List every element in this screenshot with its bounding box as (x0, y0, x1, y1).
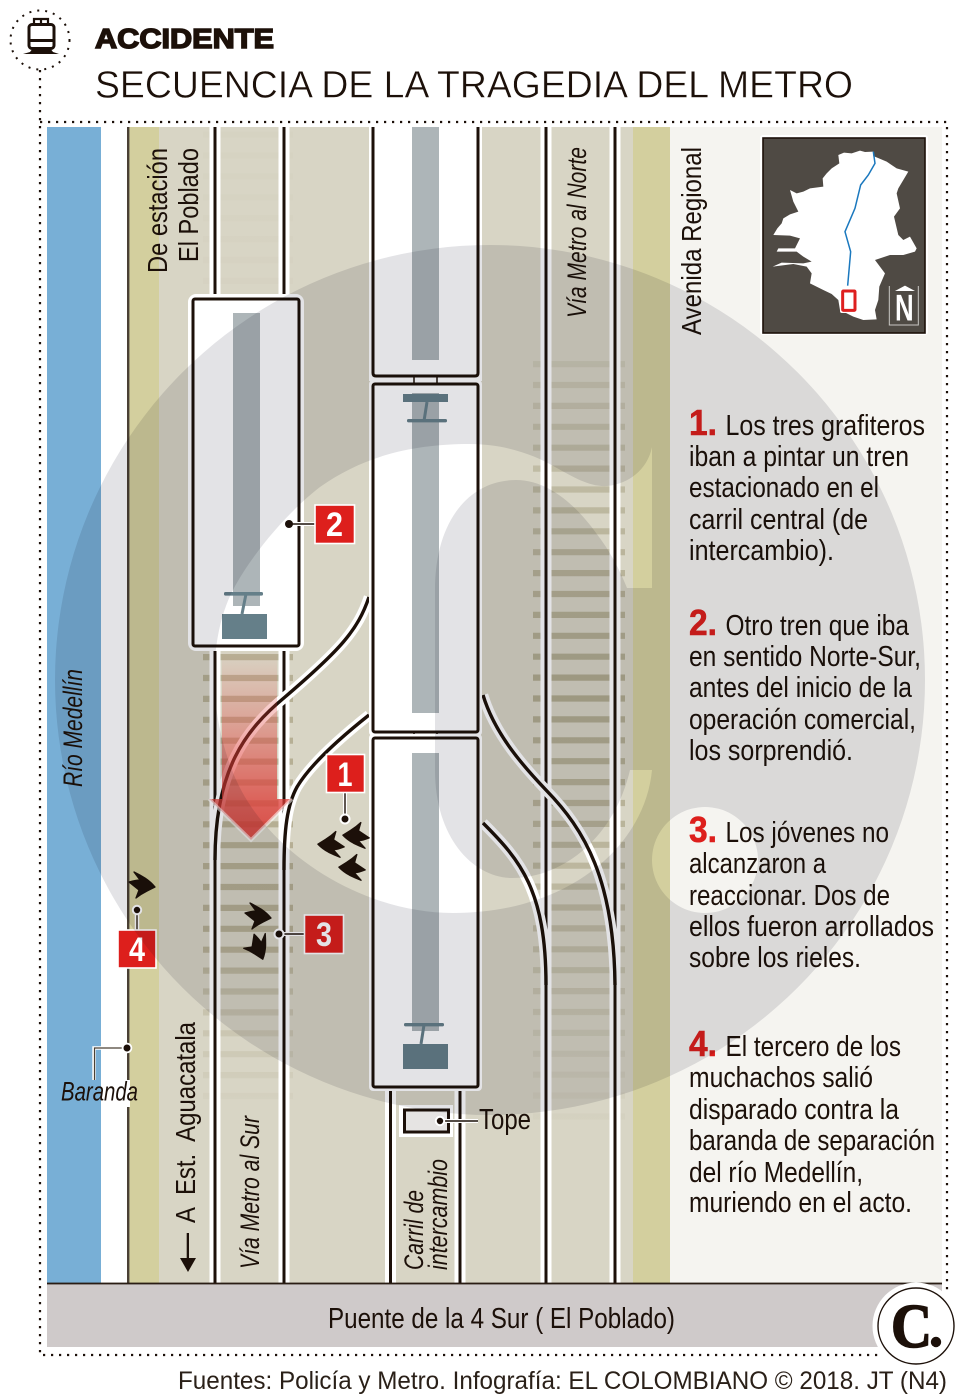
watermark: large C logo disc (55, 245, 925, 1115)
rotated labels: Río Medellín (58, 669, 88, 787)
text block: step 4: baranda de separación (689, 1125, 935, 1157)
train: parked train, upper car (369, 127, 482, 381)
Medellín river line (845, 152, 875, 286)
Medellín silhouette (773, 151, 917, 320)
text block: step 3: sobre los rieles. (689, 942, 861, 974)
coupling between cars (414, 376, 437, 738)
text block: step 1: Los tres grafiteros (726, 410, 925, 442)
text block: step 1: 1. (689, 402, 717, 443)
railing label (61, 1044, 138, 1107)
text block: step 1: iban a pintar un tren (689, 441, 909, 473)
text block: step 2: en sentido Norte-Sur, (689, 641, 921, 673)
text block: step 2: los sorprendió. (689, 735, 853, 767)
rotated labels: A Est. Aguacatala (170, 1022, 201, 1223)
text block: step 2 (689, 602, 921, 767)
buffer stop with Tope label: Tope (479, 1104, 531, 1136)
marker 2: 2 (326, 506, 343, 544)
arrow: direction of the moving train (209, 650, 292, 840)
rotated labels: Vía Metro al Sur (235, 1115, 265, 1269)
location rectangle (840, 288, 858, 313)
text block: step 1: intercambio). (689, 535, 834, 567)
text block: step 3 (689, 809, 934, 974)
rotated labels: El Poblado (173, 148, 204, 262)
text block: step 2: Otro tren que iba (726, 610, 910, 642)
track ties: Vía Metro al Sur (203, 132, 293, 1110)
text block: step 4 (689, 1023, 935, 1219)
heading: ACCIDENTE: ACCIDENTE (95, 23, 274, 54)
text block: step 1: estacionado en el (689, 472, 879, 504)
text block: step 1 (689, 402, 925, 567)
railing line (127, 127, 129, 1284)
grafitero figures: group 1 (317, 822, 370, 882)
rotated labels: intercambio (423, 1159, 453, 1270)
text block: step 2: operación comercial, (689, 704, 916, 736)
text block: step 4: del río Medellín, (689, 1157, 863, 1189)
text block: step 2: 2. (689, 602, 717, 643)
olive side strip (128, 127, 159, 1284)
straight rails (215, 127, 615, 1283)
locator map (760, 135, 928, 335)
header icon: metro train in dotted circle (10, 10, 70, 70)
marker 4: 4 (129, 931, 145, 969)
marker 3: 3 (316, 916, 332, 954)
train: parked train, middle car (369, 380, 482, 736)
panel: street plan (47, 127, 942, 1284)
train: parked train, lower car (369, 734, 482, 1091)
text block: step 3: Los jóvenes no (726, 817, 889, 849)
bridge band: Puente de la 4 Sur ( El Poblado) (328, 1303, 675, 1335)
railing label: Baranda (61, 1076, 138, 1106)
tan track bed (159, 127, 633, 1284)
text block: step 1: carril central (de (689, 504, 868, 536)
rotated labels: Avenida Regional (676, 147, 707, 335)
bridge band (47, 1283, 942, 1347)
newspaper logo (872, 1282, 960, 1370)
text block: step 4: muriendo en el acto. (689, 1187, 912, 1219)
rotated labels: Vía Metro al Norte (562, 147, 592, 318)
rotated labels: De estación (142, 148, 173, 273)
text block: step 3: 3. (689, 809, 717, 850)
text block: step 4: muchachos salió (689, 1062, 873, 1094)
heading: main title: SECUENCIA DE LA TRAGEDIA DEL METRO (95, 64, 853, 106)
newspaper logo: C (891, 1293, 932, 1361)
text block: step 4: disparado contra la (689, 1094, 900, 1126)
marker 4 (118, 906, 156, 969)
marker 1 (326, 754, 364, 824)
figures hit on the rails (240, 903, 276, 965)
Regional avenue strip (633, 127, 670, 1284)
figure at the railing (129, 872, 155, 898)
text block: step 4: 4. (689, 1023, 717, 1064)
track ties: Vía Metro al Norte (533, 361, 625, 1130)
buffer stop with Tope label (399, 1104, 531, 1137)
Medellín river (47, 127, 101, 1284)
text block: step 3: alcanzaron a (689, 848, 827, 880)
train: moving train (north-south) (193, 299, 299, 646)
north indicator: N (895, 287, 914, 329)
text block: step 3: reaccionar. Dos de (689, 880, 890, 912)
marker 2 (285, 505, 354, 544)
curved switch rails (215, 597, 615, 985)
marker 1: 1 (338, 756, 352, 794)
text block: step 2: antes del inicio de la (689, 672, 913, 704)
arrow: towards Aguacatala (180, 1233, 196, 1272)
text block: step 3: ellos fueron arrollados (689, 911, 934, 943)
rotated labels (58, 147, 707, 1270)
rotated labels: Carril de (399, 1190, 429, 1270)
source credits: Fuentes: Policía y Metro. Infografía: EL COLOMBIANO © 2018. JT (N4) (178, 1367, 947, 1395)
text block: step 4: El tercero de los (726, 1031, 901, 1063)
marker 3 (274, 915, 344, 954)
